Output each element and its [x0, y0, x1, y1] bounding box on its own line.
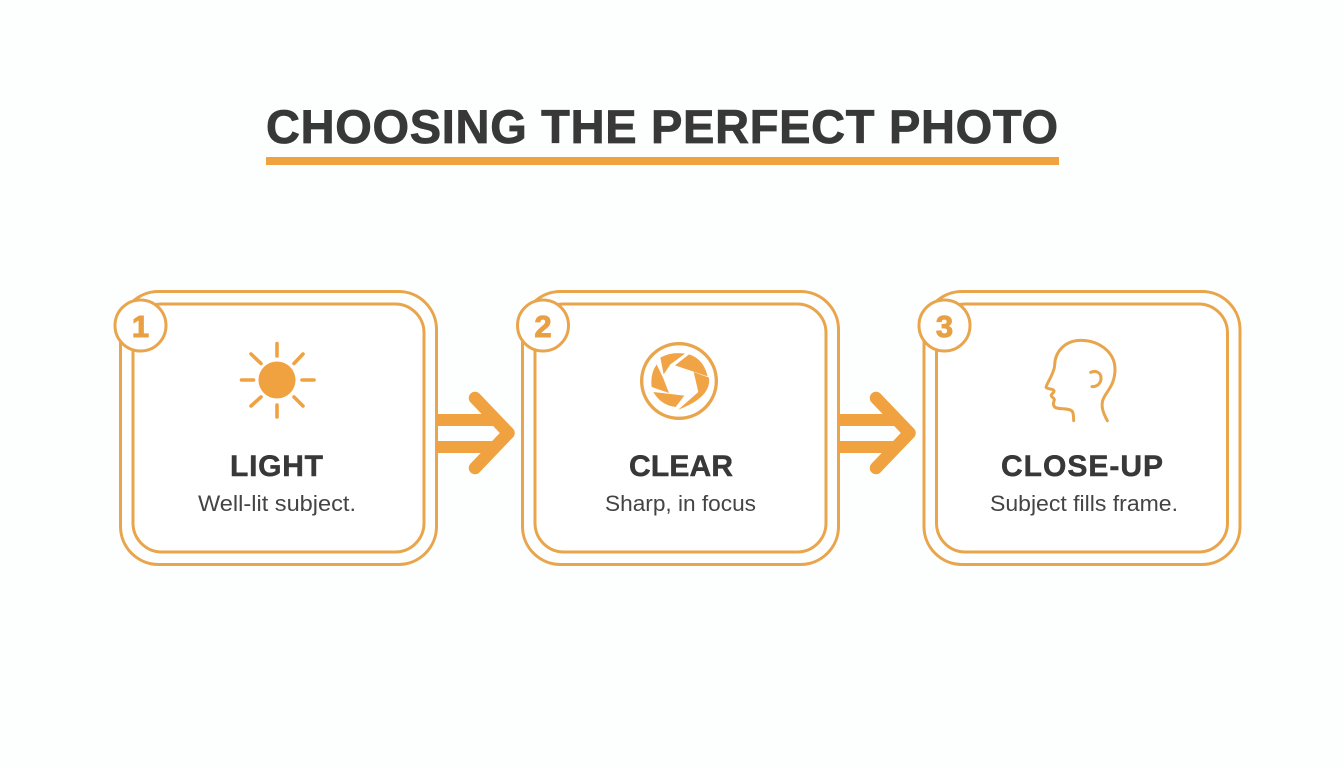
panel: step 3 close-up: [919, 292, 1240, 564]
text: clear description: Sharp, in focus: [605, 491, 756, 516]
arrow: step 1 to step 2: [437, 398, 508, 468]
card frame: [522, 292, 838, 564]
heading: close-up: CLOSE-UP: [1001, 450, 1163, 483]
number badge 1: [115, 300, 166, 351]
panel: step 2 clear: [518, 292, 838, 564]
title underline: [266, 157, 1059, 165]
card frame: [120, 292, 436, 564]
icon: head profile: [1046, 340, 1115, 421]
title: CHOOSING THE PERFECT PHOTO: [266, 100, 1058, 153]
heading: clear: CLEAR: [629, 450, 733, 483]
number badge 3: 3: [936, 309, 953, 344]
icon: camera aperture: [642, 344, 716, 418]
heading: light: LIGHT: [230, 450, 323, 483]
text: close-up description: Subject fills frame.: [990, 491, 1178, 516]
text: light description: Well-lit subject.: [198, 491, 356, 516]
arrow: step 2 to step 3: [838, 398, 910, 468]
panel: step 1 light: [115, 292, 436, 564]
icon: sun: [242, 344, 314, 417]
number badge 1: 1: [132, 309, 149, 344]
number badge 2: [518, 300, 568, 351]
card frame: [924, 292, 1240, 564]
number badge 3: [919, 300, 970, 351]
number badge 2: 2: [534, 309, 552, 344]
